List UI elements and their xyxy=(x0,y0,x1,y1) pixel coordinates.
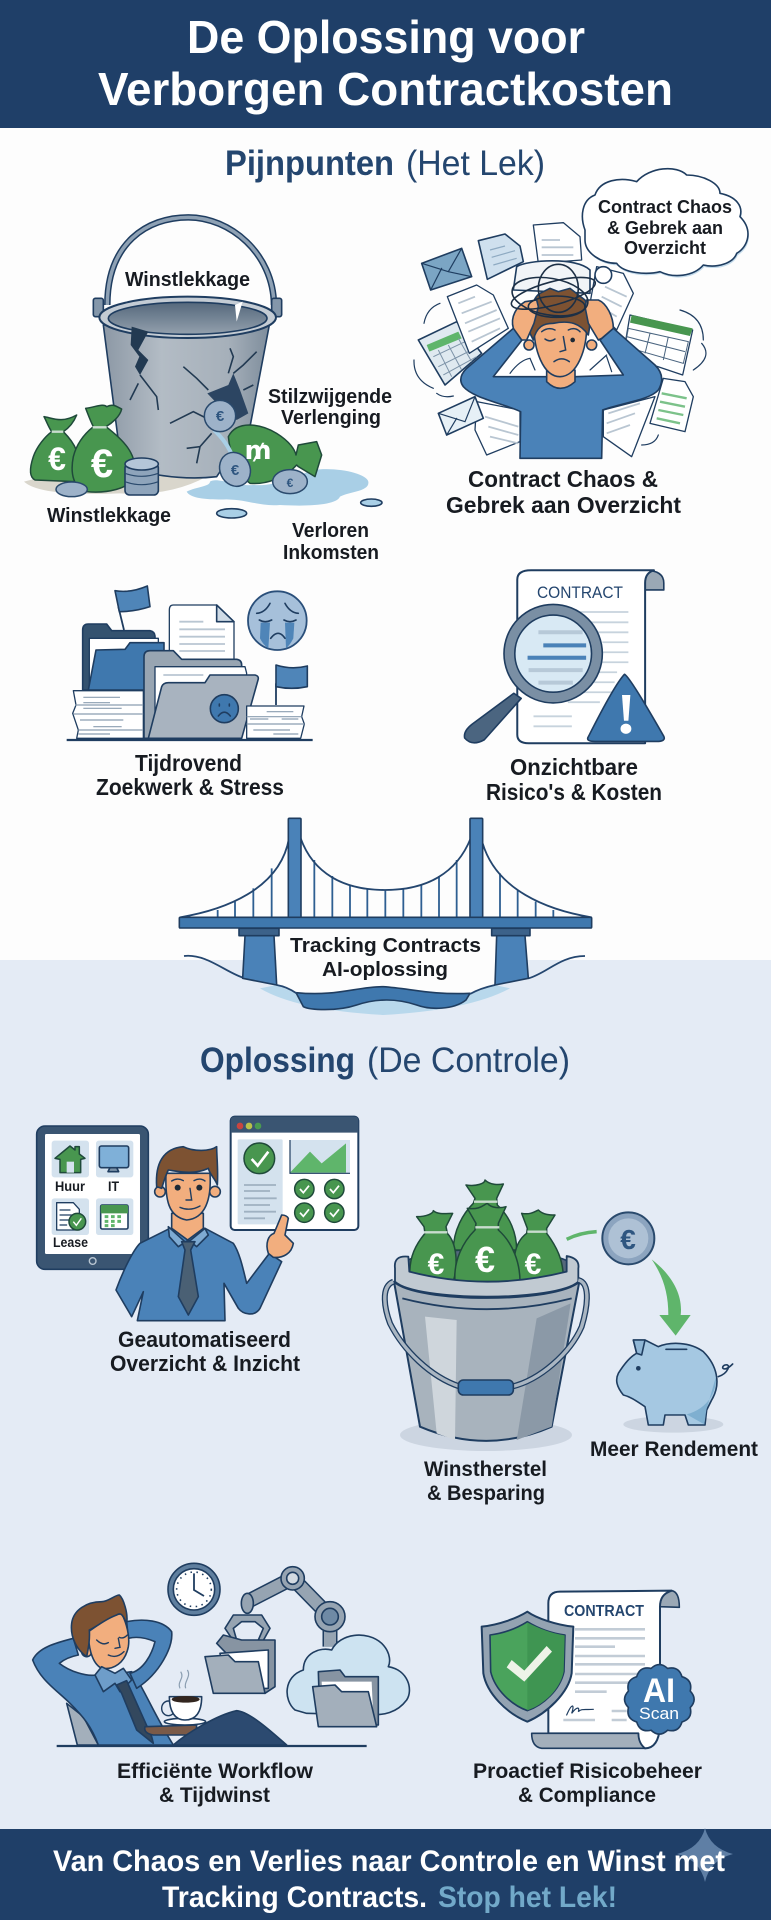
heading: Pijnpunten: Pijnpunten xyxy=(225,144,394,183)
title banner: De Oplossing voor xyxy=(187,11,585,63)
label: Geautomatiseerd Overzicht & Inzicht xyxy=(110,1327,301,1376)
icon: relaxed person with robot arm and cloud xyxy=(33,1563,409,1746)
label: Onzichtbare Risico's & Kosten: Onzichtbare xyxy=(510,754,638,780)
icon: suspension bridge: Tracking Contracts xyxy=(290,935,481,957)
icon: suspension bridge: AI-oplossing xyxy=(322,959,448,981)
icon: full bucket with money bags, coin and piggy bank: € xyxy=(428,1248,445,1281)
footer banner: Tracking Contracts. xyxy=(162,1881,427,1914)
label: Stilzwijgende Verlenging xyxy=(268,386,392,429)
icon: folders and paper stacks with sad face xyxy=(67,586,313,740)
icon: full bucket with money bags, coin and piggy bank xyxy=(385,1180,733,1451)
label: Efficiënte Workflow & Tijdwinst: & Tijdwinst xyxy=(159,1784,270,1807)
icon: leaking bucket with money bags xyxy=(24,217,382,518)
label: Winstherstel & Besparing: Winstherstel xyxy=(424,1458,547,1481)
label: Tijdrovend Zoekwerk & Stress: Zoekwerk & Stress xyxy=(96,774,284,800)
icon: full bucket with money bags, coin and piggy bank: € xyxy=(475,1239,495,1280)
label: Winstherstel & Besparing: & Besparing xyxy=(427,1482,545,1505)
icon: person with tablet and dashboard: Huur xyxy=(55,1179,86,1194)
icon: suspension bridge xyxy=(179,818,592,1015)
label: Proactief Risicobeheer & Compliance: Proactief Risicobeheer xyxy=(473,1760,702,1783)
icon: full bucket with money bags, coin and piggy bank: € xyxy=(620,1224,636,1255)
icon: leaking bucket with money bags: € xyxy=(231,462,240,479)
icon: leaking bucket with money bags: € xyxy=(216,408,225,425)
label: Verloren Inkomsten: Inkomsten xyxy=(283,542,379,564)
label: Geautomatiseerd Overzicht & Inzicht: Overzicht & Inzicht xyxy=(110,1351,301,1376)
label: Proactief Risicobeheer & Compliance xyxy=(473,1760,702,1807)
icon: shield, contract and AI scan badge: CONTRACT xyxy=(564,1603,644,1620)
label: Stilzwijgende Verlenging: Verlenging xyxy=(281,407,381,429)
label: Winstlekkage bottom: Winstlekkage xyxy=(47,505,171,527)
icon: sparkle xyxy=(677,1828,733,1882)
icon: leaking bucket with money bags: ₥ xyxy=(244,436,272,466)
icon: stressed person among documents xyxy=(414,169,749,458)
label: Efficiënte Workflow & Tijdwinst: Efficiënte Workflow xyxy=(117,1760,314,1783)
footer banner xyxy=(0,1828,771,1920)
heading: Oplossing: Oplossing xyxy=(200,1041,355,1080)
label: Contract Chaos & Gebrek aan Overzicht: Contract Chaos & xyxy=(468,466,658,492)
label: Verloren Inkomsten: Verloren xyxy=(292,520,369,542)
label: Efficiënte Workflow & Tijdwinst xyxy=(117,1760,314,1807)
label: Onzichtbare Risico's & Kosten xyxy=(486,754,662,805)
icon: shield, contract and AI scan badge: AI xyxy=(643,1672,675,1710)
label: Onzichtbare Risico's & Kosten: Risico's & Kosten xyxy=(486,779,662,805)
title banner xyxy=(0,0,771,128)
label: Stilzwijgende Verlenging: Stilzwijgende xyxy=(268,386,392,408)
footer banner: Stop het Lek! xyxy=(438,1881,617,1914)
icon: shield, contract and AI scan badge: Scan xyxy=(639,1704,679,1723)
icon: leaking bucket with money bags: € xyxy=(91,442,113,486)
icon: stressed person among documents: Contract Chaos xyxy=(598,197,732,217)
label: Tijdrovend Zoekwerk & Stress xyxy=(96,750,284,800)
heading: Oplossing: (De Controle) xyxy=(367,1041,570,1080)
icon: stressed person among documents: Overzicht xyxy=(624,238,706,258)
label: Verloren Inkomsten xyxy=(283,520,379,564)
icon: contract with magnifier and warning: CONTRACT xyxy=(537,584,623,602)
label: Tijdrovend Zoekwerk & Stress: Tijdrovend xyxy=(135,750,242,776)
icon: person with tablet and dashboard xyxy=(37,1117,358,1321)
label: Winstlekkage top: Winstlekkage xyxy=(125,269,250,291)
icon: person with tablet and dashboard: IT xyxy=(108,1179,120,1194)
label: Proactief Risicobeheer & Compliance: & Compliance xyxy=(518,1784,656,1807)
icon: full bucket with money bags, coin and piggy bank: € xyxy=(525,1248,542,1281)
icon: leaking bucket with money bags: € xyxy=(287,476,294,490)
icon: leaking bucket with money bags: € xyxy=(48,441,66,477)
icon: person with tablet and dashboard: Lease xyxy=(53,1235,88,1250)
icon: shield, contract and AI scan badge xyxy=(482,1591,694,1748)
label: Winstherstel & Besparing xyxy=(424,1458,547,1505)
heading: Pijnpunten: (Het Lek) xyxy=(406,144,545,183)
label: Contract Chaos & Gebrek aan Overzicht: Gebrek aan Overzicht xyxy=(446,492,681,518)
label: Geautomatiseerd Overzicht & Inzicht: Geautomatiseerd xyxy=(118,1327,291,1352)
label: Meer Rendement: Meer Rendement xyxy=(590,1438,758,1461)
icon: contract with magnifier and warning xyxy=(464,570,664,743)
icon: stressed person among documents: & Gebrek aan xyxy=(607,218,723,238)
label: Contract Chaos & Gebrek aan Overzicht xyxy=(446,466,681,518)
title banner: Verborgen Contractkosten xyxy=(98,63,673,115)
footer banner: Van Chaos en Verlies naar Controle en Winst met xyxy=(53,1845,725,1878)
